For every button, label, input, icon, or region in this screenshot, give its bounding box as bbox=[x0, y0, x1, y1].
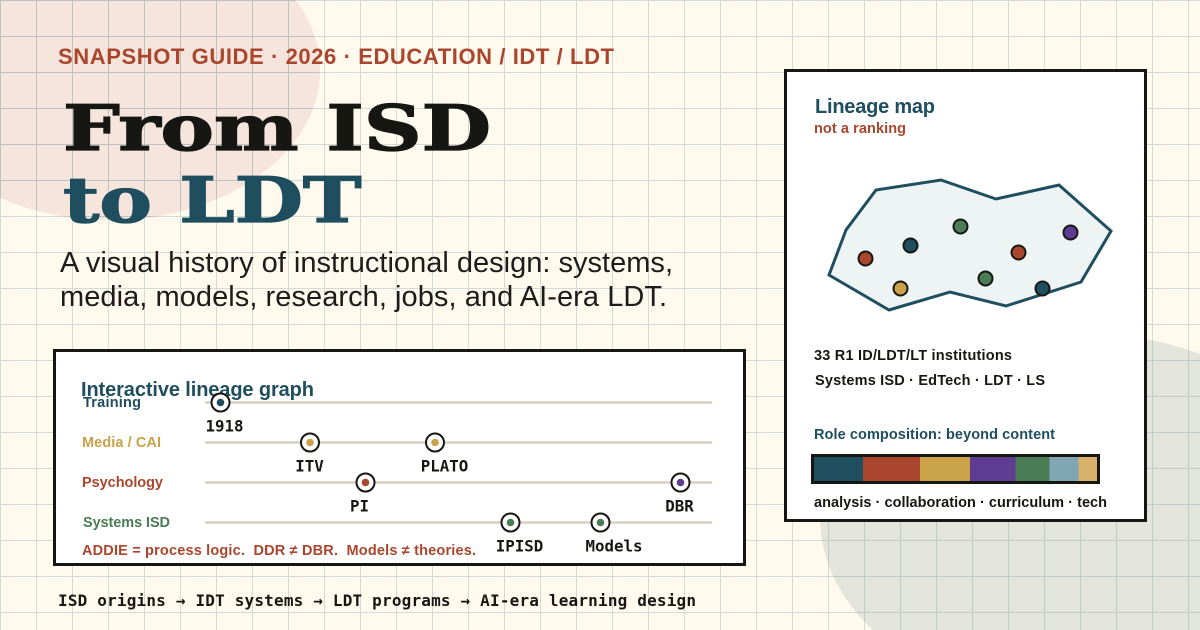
map region bbox=[829, 180, 1111, 310]
subtitle: A visual history of instructional design: systems, bbox=[60, 247, 673, 279]
panel: lineage map bbox=[786, 70, 1146, 520]
eyebrow: SNAPSHOT GUIDE · 2026 · EDUCATION / IDT / LDT bbox=[58, 44, 615, 69]
node labels: IPISD bbox=[496, 536, 543, 556]
map caption: 33 R1 ID/LDT/LT institutions bbox=[814, 348, 1012, 364]
node labels: DBR bbox=[665, 496, 694, 516]
graph note: ADDIE = process logic. DDR ≠ DBR. Models ≠ theories. bbox=[82, 543, 476, 559]
footer line: ISD origins → IDT systems → LDT programs → AI-era learning design bbox=[58, 591, 696, 610]
map caption: Systems ISD · EdTech · LDT · LS bbox=[815, 373, 1045, 389]
subtitle bbox=[60, 247, 673, 313]
map subheading: not a ranking bbox=[814, 121, 906, 137]
node labels: PI bbox=[350, 496, 369, 516]
title bbox=[63, 91, 491, 237]
panel: interactive lineage graph bbox=[54, 350, 744, 564]
track labels: Training bbox=[83, 395, 141, 411]
role composition bar bbox=[812, 456, 1098, 482]
map caption bbox=[814, 348, 1045, 389]
role composition heading: Role composition: beyond content bbox=[814, 427, 1055, 443]
node labels bbox=[205, 416, 694, 556]
role caption: analysis · collaboration · curriculum · tech bbox=[814, 495, 1107, 511]
title: From ISD bbox=[63, 91, 491, 165]
node labels: Models bbox=[585, 536, 643, 556]
map institution dots bbox=[858, 220, 1078, 296]
graph heading: Interactive lineage graph bbox=[81, 379, 314, 401]
track labels bbox=[82, 395, 170, 531]
node labels: PLATO bbox=[421, 456, 468, 476]
track lines bbox=[205, 402, 712, 522]
track labels: Systems ISD bbox=[83, 515, 170, 531]
track labels: Media / CAI bbox=[82, 435, 161, 451]
title: to LDT bbox=[63, 163, 362, 237]
map heading: Lineage map bbox=[815, 96, 935, 118]
node labels: ITV bbox=[295, 456, 324, 476]
timeline nodes bbox=[212, 394, 690, 532]
track labels: Psychology bbox=[82, 475, 163, 491]
subtitle: media, models, research, jobs, and AI-era LDT. bbox=[60, 281, 667, 313]
node labels: 1918 bbox=[205, 416, 244, 436]
